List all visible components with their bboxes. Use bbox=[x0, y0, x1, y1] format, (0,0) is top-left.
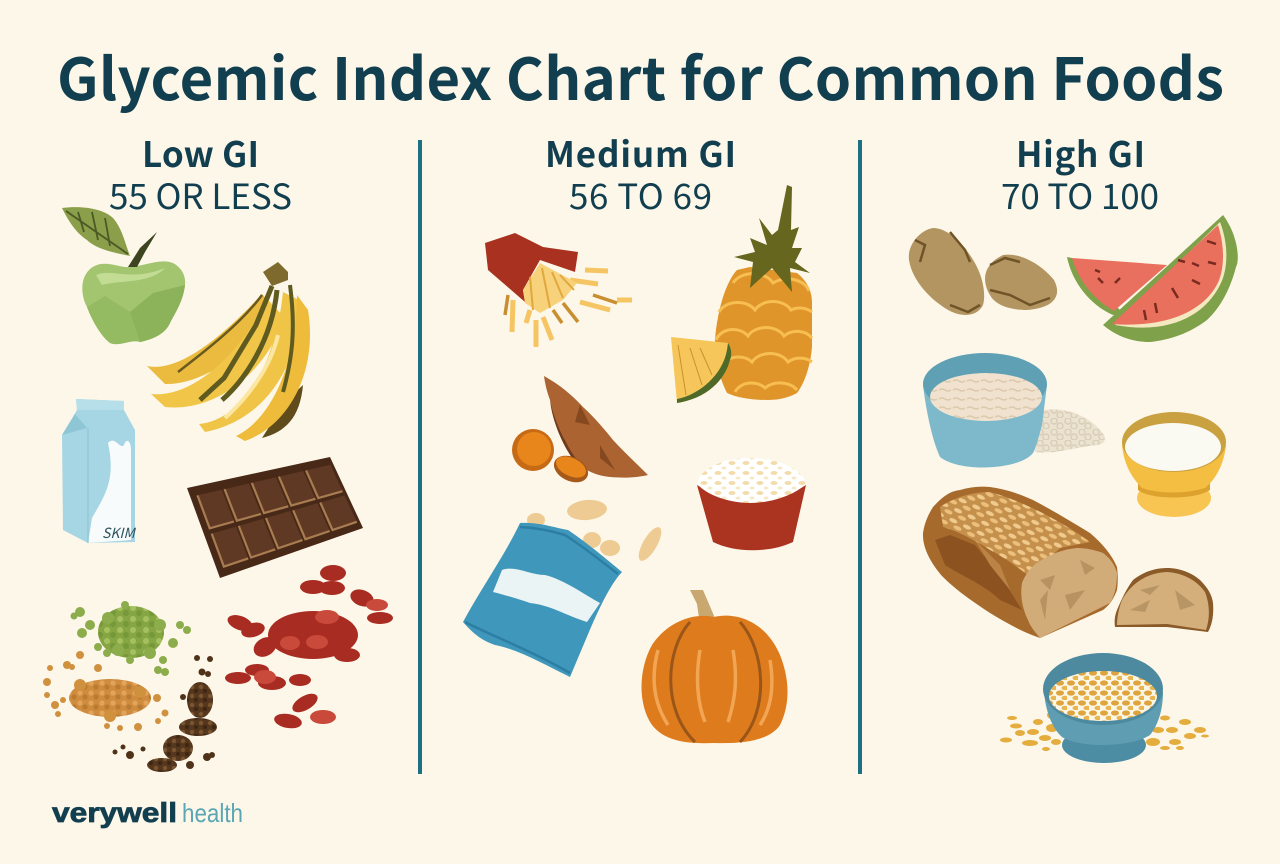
icon: yellow bowl of rice bbox=[1122, 412, 1226, 517]
icon: skim milk carton bbox=[62, 399, 136, 543]
icon: oat spill bbox=[1035, 409, 1105, 453]
icon: skim milk carton: SKIM bbox=[102, 523, 136, 543]
icon: green apple bbox=[62, 207, 185, 344]
icon: chips bbox=[527, 498, 666, 564]
heading: High GI: High GI bbox=[1016, 127, 1145, 178]
heading: Low GI bbox=[109, 127, 292, 220]
title: Glycemic Index Chart for Common Foods bbox=[57, 33, 1224, 117]
divider: left bbox=[418, 140, 422, 774]
icon: spilled cereal bbox=[1000, 711, 1209, 751]
divider: right bbox=[858, 140, 862, 774]
icon: kidney beans bbox=[225, 565, 393, 730]
icon: pumpkin bbox=[642, 590, 788, 743]
icon: bananas bbox=[147, 262, 310, 441]
icon: chips bag bbox=[463, 523, 622, 677]
heading: Low GI: 55 OR LESS bbox=[109, 169, 292, 220]
heading: Medium GI bbox=[545, 127, 736, 220]
heading: Low GI: Low GI bbox=[142, 127, 259, 178]
icon: bread slice bbox=[1115, 568, 1213, 632]
heading: Medium GI: 56 TO 69 bbox=[569, 169, 712, 220]
icon: green peas bbox=[70, 601, 191, 676]
icon: blue bowl of oats bbox=[923, 353, 1047, 468]
icon: watermelon bbox=[1067, 215, 1238, 342]
logo: verywell health bbox=[52, 797, 243, 828]
heading: Medium GI: Medium GI bbox=[545, 127, 736, 178]
icon: brown lentils bbox=[112, 655, 217, 772]
icon: bread loaf bbox=[923, 487, 1118, 638]
heading: High GI bbox=[1001, 127, 1159, 220]
icon: potatoes bbox=[909, 228, 1057, 315]
icon: pineapple bbox=[671, 185, 812, 403]
icon: bowl of cereal bbox=[1043, 653, 1163, 763]
icon: orange lentils bbox=[43, 651, 168, 731]
icon: chocolate bar bbox=[187, 457, 363, 578]
icon: sweet potato bbox=[512, 376, 648, 487]
heading: High GI: 70 TO 100 bbox=[1001, 169, 1159, 220]
logo: verywell health: health bbox=[182, 798, 243, 828]
icon: french fries bbox=[485, 233, 632, 347]
icon: popcorn bowl bbox=[697, 458, 806, 550]
logo: verywell health: verywell bbox=[52, 797, 177, 828]
